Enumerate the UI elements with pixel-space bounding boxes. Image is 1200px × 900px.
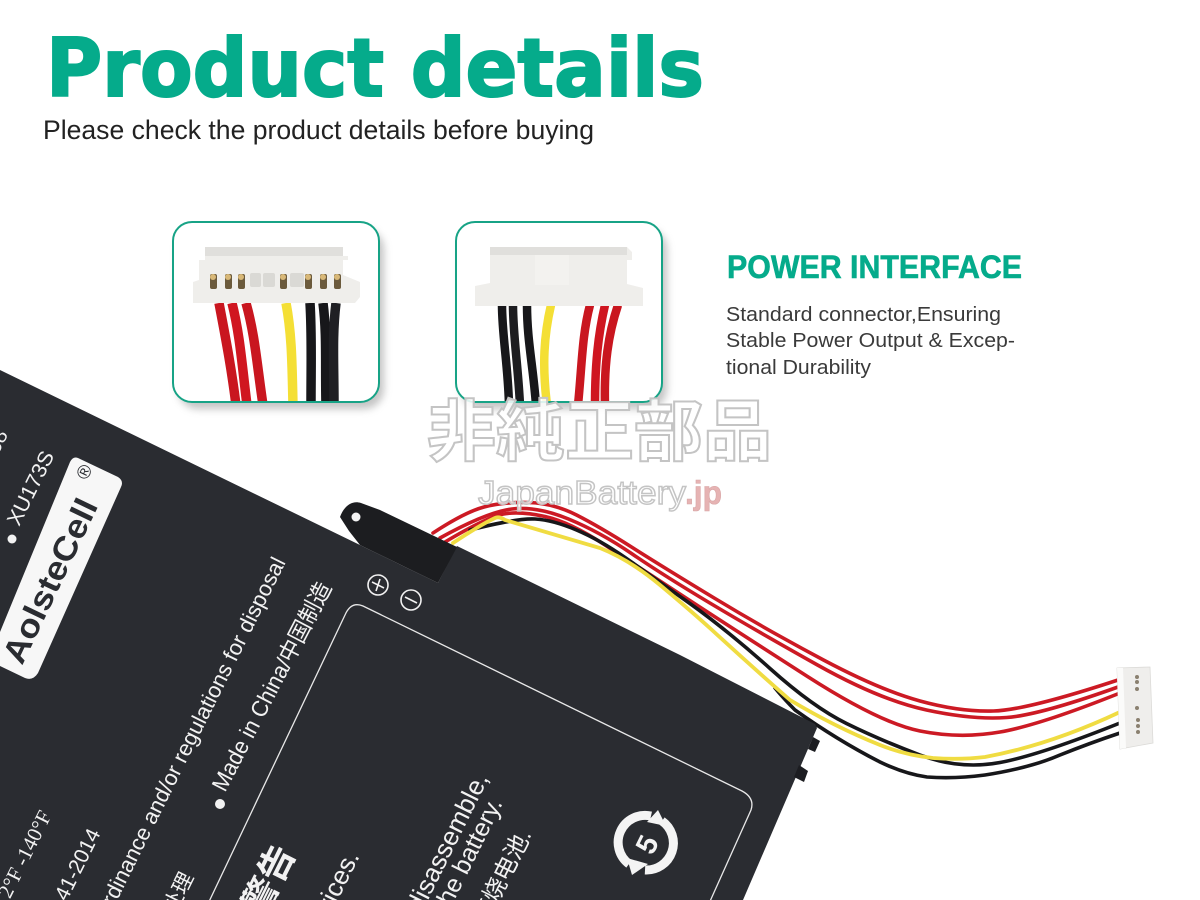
- connector clip: [340, 502, 457, 583]
- polarity plus: [368, 575, 388, 595]
- watermark: JapanBattery.jp: .jp: [685, 474, 722, 511]
- warning frame: [206, 605, 752, 900]
- text block: power interface description: tional Durability: [726, 357, 871, 379]
- mounting hole: [352, 512, 360, 522]
- panel: connector front photo: [173, 222, 384, 409]
- watermark: JapanBattery.jp: JapanBattery: [478, 474, 687, 511]
- label text: model: XU173S: [3, 447, 59, 529]
- text block: power interface description: [726, 304, 1015, 379]
- warning text: [296, 767, 537, 900]
- icon: recycle 5: 5: [630, 831, 666, 859]
- wires: battery harness: [433, 502, 1120, 778]
- end connector: [1117, 667, 1153, 749]
- subtitle: Please check the product details before buying: [43, 115, 594, 145]
- label text: made in china: Made in China/中国制造: [206, 578, 337, 795]
- label text: model: [0, 426, 59, 544]
- heading: power interface: POWER INTERFACE: [727, 249, 1022, 285]
- polarity minus: [401, 590, 421, 610]
- icon: recycle 5: [618, 810, 673, 875]
- battery body: [0, 370, 820, 900]
- text block: power interface description: Stable Power Output & Excep-: [726, 330, 1015, 352]
- watermark: 非純正部品: 非純正部品: [427, 378, 772, 475]
- brand label: ®: [73, 461, 98, 483]
- text block: power interface description: Standard connector,Ensuring: [726, 304, 1001, 326]
- title: Product details: [46, 22, 704, 115]
- panel: connector back photo: [456, 222, 667, 409]
- brand label: [0, 458, 122, 679]
